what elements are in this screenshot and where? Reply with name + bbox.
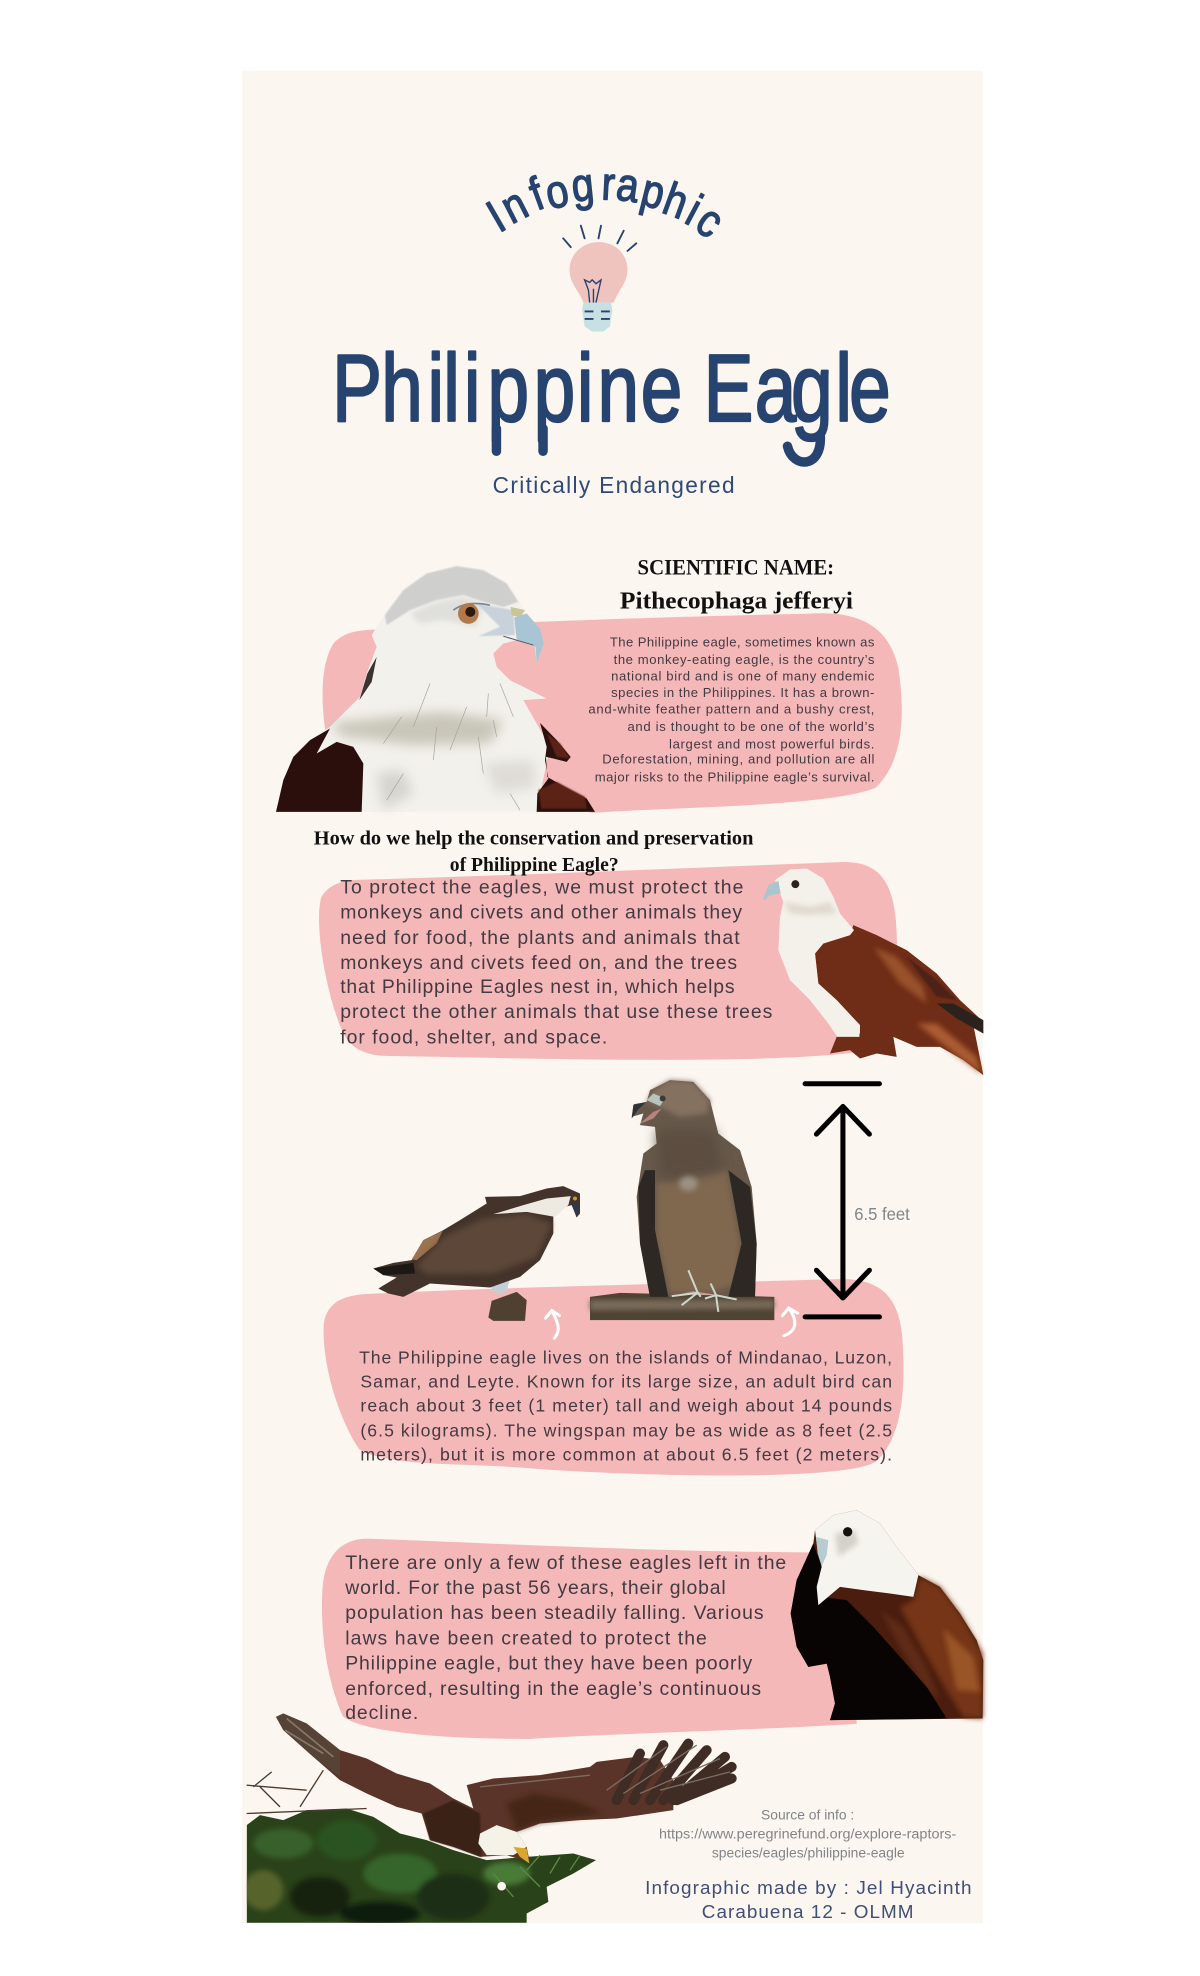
arched heading: h — [657, 173, 695, 230]
tree — [243, 1770, 600, 1925]
text block: habitat and size — [359, 1347, 892, 1464]
text block: description: largest and most powerful birds. — [669, 737, 874, 752]
photo: eagle white and chestnut — [763, 869, 983, 1075]
pink blob backgrounds — [319, 613, 904, 1739]
blob 2 — [319, 862, 897, 1060]
text block: description: the monkey-eating eagle, is the country’s — [614, 652, 875, 667]
arrow: height marker — [805, 1084, 879, 1317]
photo: eagle facing left — [791, 1510, 983, 1720]
arched heading: p — [636, 165, 670, 220]
text block: population decline: laws have been created to protect the — [345, 1627, 707, 1649]
text block: description: and-white feather pattern and a bushy crest, — [588, 701, 874, 716]
osprey legs — [490, 1264, 514, 1294]
heading: conservation question: of Philippine Eagle? — [450, 854, 619, 876]
text block: description: and is thought to be one of the world’s — [627, 719, 875, 734]
photo: osprey and standing eagle — [373, 1080, 774, 1321]
text block: how to protect: that Philippine Eagles nest in, which helps — [340, 976, 735, 998]
text block: description — [588, 635, 875, 784]
icon: small white arrows — [546, 1308, 798, 1338]
osprey body — [373, 1186, 580, 1297]
source credit: Source of info : — [761, 1807, 854, 1823]
osprey perch — [488, 1292, 527, 1321]
scientific name heading — [620, 555, 853, 615]
icon: light bulb — [563, 226, 636, 332]
label: 6.5 feet: 6.5 feet — [854, 1204, 910, 1224]
source credit: https://www.peregrinefund.org/explore-raptors- — [659, 1825, 956, 1841]
photo: eagle head portrait — [276, 566, 595, 812]
text block: how to protect: monkeys and civets and other animals they — [340, 902, 742, 924]
standing eagle branch — [590, 1293, 774, 1320]
arched heading: g — [569, 159, 596, 212]
text block: description: species in the Philippines. It has a brown- — [611, 685, 874, 700]
text block: habitat and size: Samar, and Leyte. Known for its large size, an adult bird can — [360, 1371, 892, 1391]
text block: description: major risks to the Philippine eagle’s survival. — [595, 769, 874, 784]
arched heading: f — [523, 168, 552, 221]
text block: habitat and size: meters), but it is more common at about 6.5 feet (2 meters). — [360, 1444, 892, 1464]
text block: how to protect — [340, 877, 772, 1048]
arched heading: I — [478, 192, 514, 243]
arched heading — [478, 158, 733, 248]
heading: conservation question — [314, 827, 754, 876]
text block: population decline — [344, 1552, 786, 1724]
text block: population decline: population has been steadily falling. Various — [345, 1602, 764, 1624]
subtitle: Critically Endangered — [493, 472, 735, 498]
text block: how to protect: for food, shelter, and space. — [340, 1026, 607, 1048]
text block: habitat and size: (6.5 kilograms). The wingspan may be as wide as 8 feet (2.5 — [360, 1421, 892, 1441]
text block: population decline: decline. — [345, 1702, 418, 1724]
source credit: species/eagles/philippine-eagle — [712, 1844, 905, 1860]
text block: population decline: There are only a few of these eagles left in the — [345, 1552, 786, 1574]
scientific name heading: SCIENTIFIC NAME: — [638, 555, 834, 580]
text block: population decline: Philippine eagle, but they have been poorly — [345, 1653, 753, 1675]
text block: how to protect: To protect the eagles, we must protect the — [340, 877, 743, 899]
scientific name heading: Pithecophaga jefferyi — [620, 589, 853, 615]
text block: description: Deforestation, mining, and pollution are all — [602, 752, 875, 767]
author credit — [645, 1878, 971, 1923]
eagle — [276, 1714, 732, 1864]
standing eagle body — [632, 1080, 757, 1297]
arched heading: i — [678, 186, 710, 236]
photo: flying eagle over treetop — [243, 1714, 732, 1925]
text block: habitat and size: reach about 3 feet (1 meter) tall and weigh about 14 pounds — [360, 1395, 892, 1415]
standing eagle legs — [672, 1270, 737, 1312]
blob 1 — [323, 613, 902, 813]
text block: habitat and size: The Philippine eagle lives on the islands of Mindanao, Luzon, — [359, 1347, 892, 1367]
text block: population decline: enforced, resulting in the eagle’s continuous — [345, 1678, 761, 1700]
title block — [332, 158, 891, 498]
source credit — [659, 1807, 956, 1860]
arched heading: a — [613, 159, 643, 213]
author credit: Infographic made by : Jel Hyacinth — [645, 1878, 971, 1899]
arched heading: r — [600, 158, 616, 211]
author credit: Carabuena 12 - OLMM — [702, 1902, 913, 1923]
text block: description: The Philippine eagle, sometimes known as — [610, 635, 875, 650]
main title: Philippine Eagle — [332, 335, 891, 442]
blob 3 — [324, 1279, 904, 1476]
arched heading: n — [493, 178, 536, 234]
text block: population decline: world. For the past 56 years, their global — [344, 1577, 726, 1599]
background panel — [242, 71, 983, 1923]
heading: conservation question: How do we help the conservation and preservation — [314, 827, 754, 849]
text block: how to protect: protect the other animals that use these trees — [340, 1001, 772, 1023]
arched heading: c — [687, 195, 733, 248]
blob 4 — [322, 1539, 857, 1739]
text block: description: national bird and is one of many endemic — [611, 669, 875, 684]
diagram: size comparison — [373, 1080, 910, 1338]
arched heading: o — [541, 165, 573, 220]
text block: how to protect: need for food, the plants and animals that — [340, 927, 740, 949]
text block: how to protect: monkeys and civets feed on, and the trees — [340, 952, 737, 974]
